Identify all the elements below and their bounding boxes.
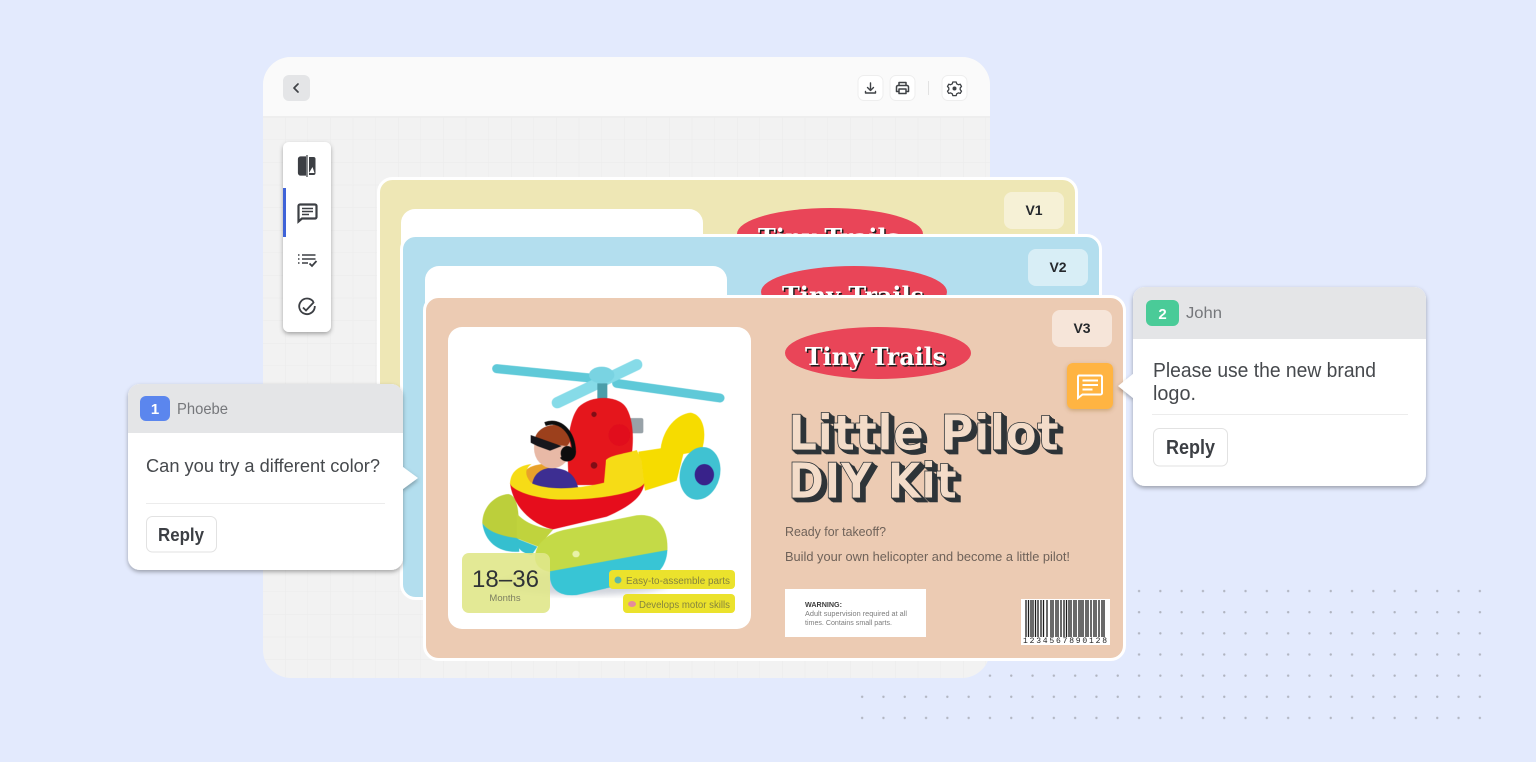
reply button: Reply (158, 524, 205, 545)
comment text (1153, 360, 1376, 405)
logo V3 (785, 327, 971, 379)
app window (263, 57, 990, 678)
feature tag: motor skills (623, 594, 735, 613)
logo V3: Tiny Trails (805, 342, 946, 371)
rear floats (482, 494, 519, 540)
comment bubble: Phoebe (128, 384, 418, 570)
barcode: 1234567890128 (1023, 637, 1107, 646)
product title (788, 405, 1059, 510)
comment bubble: John (1118, 287, 1426, 486)
cabin (568, 398, 633, 485)
reply button (146, 516, 216, 552)
barcode (1021, 599, 1110, 646)
icon: comment (298, 204, 316, 222)
product title: Little Pilot (788, 405, 1059, 462)
author name: Phoebe (177, 401, 228, 418)
feature tag: easy to assemble: Easy-to-assemble parts (626, 576, 730, 587)
product title: DIY Kit (788, 453, 957, 510)
card: version 2 (402, 236, 1100, 598)
tagline (785, 524, 1070, 564)
version tag V2 (1028, 249, 1088, 286)
warning box: times. Contains small parts. (805, 620, 892, 627)
age badge (462, 553, 550, 613)
logo V2: Tiny Trails (782, 281, 924, 310)
icon: compare (298, 155, 316, 177)
logo V1: Tiny Trails (758, 223, 900, 252)
comment text: Please use the new brand (1153, 360, 1376, 382)
exhaust (627, 418, 643, 433)
version tag V3 (1052, 310, 1112, 347)
feature tag: easy to assemble (609, 570, 735, 589)
cockpit interior (522, 464, 573, 495)
pilot (532, 468, 579, 492)
rotor (497, 369, 720, 398)
age badge: 18–36 (472, 566, 539, 593)
tagline: Ready for takeoff? (785, 524, 886, 539)
product image panel (448, 327, 751, 629)
dot pattern decoration (852, 580, 1490, 729)
card: version 3 (424, 296, 1124, 660)
warning box: WARNING: (805, 602, 842, 609)
comment text: Can you try a different color? (146, 455, 380, 476)
warning box (785, 589, 926, 637)
front float (535, 515, 667, 572)
icon: settings (942, 76, 967, 100)
badge 2 (1146, 300, 1179, 326)
hull (510, 483, 644, 529)
helicopter illustration (482, 358, 725, 598)
version tag V3: V3 (1073, 320, 1091, 336)
reply button: Reply (1166, 437, 1216, 459)
back button (283, 75, 310, 101)
tagline: Build your own helicopter and become a little pilot! (785, 549, 1070, 564)
comment text: logo. (1153, 383, 1196, 405)
logo V2 (761, 266, 947, 318)
badge 2: 2 (1158, 306, 1167, 323)
card: version 1 (378, 178, 1076, 542)
hull rim (510, 450, 644, 500)
logo V1 (737, 208, 923, 260)
icon: download (858, 76, 883, 100)
icon: print (890, 76, 915, 100)
feature tag: motor skills: Develops motor skills (639, 600, 730, 611)
reply button (1154, 428, 1228, 466)
age badge: Months (489, 593, 521, 604)
badge 1 (140, 396, 170, 421)
author name: John (1186, 305, 1222, 322)
icon: checklist (298, 255, 316, 266)
icon: check circle (299, 299, 315, 314)
version tag V2: V2 (1049, 259, 1067, 275)
tail (638, 413, 704, 491)
sidebar toolbar (283, 142, 331, 332)
warning box: Adult supervision required at all (805, 611, 907, 618)
badge 1: 1 (151, 401, 159, 418)
version tag V1 (1004, 192, 1064, 229)
version tag V1: V1 (1025, 202, 1043, 218)
comment marker icon (1067, 363, 1113, 409)
